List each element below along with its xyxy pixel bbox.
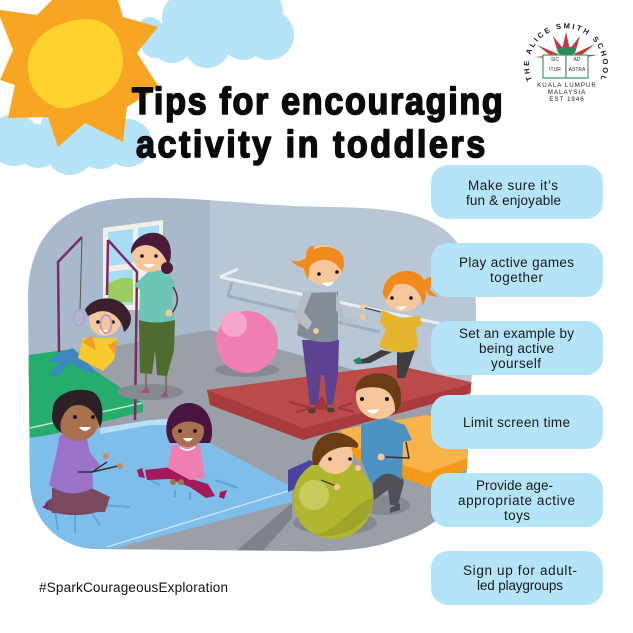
tip box 5: toys <box>504 508 530 523</box>
title <box>132 79 503 165</box>
tip box 1: fun & enjoyable <box>466 193 561 208</box>
logo: The Alice Smith School: ITUR <box>549 67 561 73</box>
icon: sun <box>0 0 159 147</box>
tip box 4: Limit screen time <box>463 415 570 430</box>
rays <box>535 32 597 59</box>
character: orange haired mother <box>289 245 366 414</box>
character: man in blue <box>355 373 412 515</box>
logo: The Alice Smith School: MALAYSIA <box>548 89 586 96</box>
red mat <box>207 365 475 440</box>
book <box>543 55 588 78</box>
cloud: lower left <box>0 100 152 175</box>
tip box 4 <box>431 395 603 449</box>
tip box 3: being active <box>479 341 554 356</box>
ring ropes <box>74 238 84 326</box>
tip box 2: together <box>490 270 544 285</box>
tip box 2: Play active games <box>459 255 574 270</box>
tip box 3 <box>431 321 603 375</box>
tip box 2 <box>431 243 603 297</box>
tip box 5: Provide age- <box>476 478 553 493</box>
tip box 6: led playgroups <box>477 578 563 593</box>
logo: The Alice Smith School: SIC <box>551 57 560 63</box>
pink ball <box>215 311 279 377</box>
character: seated girl <box>137 403 227 499</box>
tip box 5 <box>431 473 603 527</box>
window <box>103 220 163 310</box>
tip box 1 <box>431 165 603 219</box>
character: boy with ball <box>288 433 377 539</box>
cloud: top <box>137 0 294 68</box>
tip box 1: Make sure it’s <box>468 178 558 193</box>
orange mat <box>340 415 475 487</box>
character: seated woman <box>42 390 123 515</box>
tip box 3: yourself <box>491 356 541 371</box>
character: boy on rings <box>48 298 131 377</box>
tip box 3: Set an example by <box>459 326 574 341</box>
gymnastic bars <box>58 237 137 420</box>
hashtag: #SparkCourageousExploration <box>39 580 228 595</box>
title: Tips for encouraging <box>132 79 503 122</box>
logo: The Alice Smith School: AD <box>574 57 581 63</box>
character: teal mother <box>117 233 183 400</box>
tip box 6 <box>431 551 603 605</box>
logo: The Alice Smith School: KUALA LUMPUR <box>537 82 597 89</box>
illustration: gym scene <box>28 198 476 552</box>
logo: The Alice Smith School: ASTRA <box>569 67 586 73</box>
blue mat <box>20 419 292 552</box>
logo: The Alice Smith School: THE ALICE SMITH SCHOOL <box>524 23 608 82</box>
logo: The Alice Smith School: EST 1946 <box>549 96 585 103</box>
floor <box>28 330 468 552</box>
tip box 6: Sign up for adult- <box>463 563 577 578</box>
tip box 5: appropriate active <box>458 493 575 508</box>
title: activity in toddlers <box>136 122 485 165</box>
character: orange haired girl <box>353 271 438 378</box>
ballet barre <box>220 269 470 332</box>
green mat <box>28 350 143 440</box>
